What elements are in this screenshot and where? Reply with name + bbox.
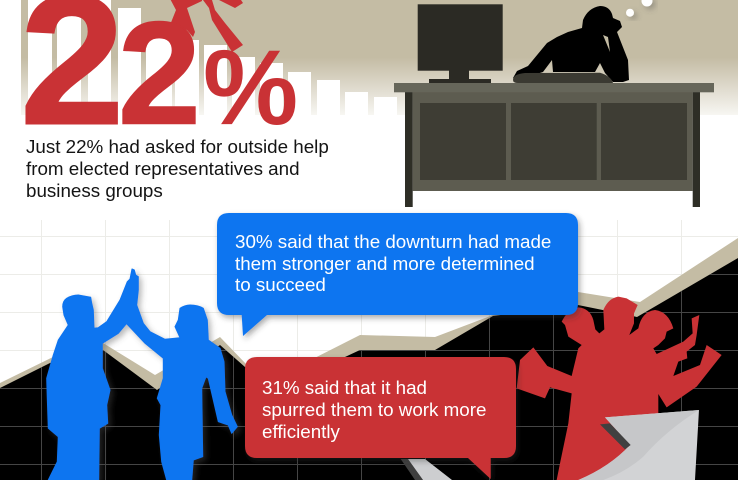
- caption: outside help: Just 22% had asked for outside help: [26, 136, 329, 157]
- big number 22% with climbing figure: [20, 0, 298, 163]
- descending white bars: [28, 0, 397, 115]
- percent sign: %: [203, 27, 298, 147]
- caption: outside help: business groups: [26, 180, 163, 201]
- desk: [394, 83, 714, 207]
- red bubble text: efficiently: [262, 421, 341, 442]
- desk scene: [394, 0, 714, 207]
- silhouette of worried man at desk: [513, 6, 629, 82]
- caption: outside help: [26, 136, 329, 201]
- caption: outside help: from elected representatives and: [26, 158, 300, 179]
- black area under line: [0, 258, 738, 480]
- red figure legs: [170, 0, 243, 52]
- red group of people with documents: [517, 297, 722, 480]
- blue high-five silhouettes: [47, 269, 237, 480]
- paper plane left fragment: [401, 459, 452, 480]
- beige trend band: [0, 238, 738, 480]
- blue bubble text: to succeed: [235, 274, 326, 295]
- arm rest: [513, 73, 613, 83]
- speech bubble: blue: [217, 213, 578, 336]
- blue bubble text: them stronger and more determined: [235, 253, 535, 274]
- panel: top scene background: [21, 0, 738, 115]
- rising line chart background: [0, 220, 738, 480]
- red bubble text: [262, 377, 486, 442]
- computer monitor: [418, 4, 503, 83]
- speech bubble: red: [245, 357, 516, 479]
- red bubble text: 31% said that it had: [262, 377, 427, 398]
- paper plane: [578, 410, 699, 480]
- gap between arm and head: [603, 35, 610, 52]
- blue bubble text: [235, 231, 551, 295]
- blue bubble text: 30% said that the downturn had made: [235, 231, 551, 252]
- thought bubbles: [626, 0, 652, 17]
- red bubble text: spurred them to work more: [262, 399, 486, 420]
